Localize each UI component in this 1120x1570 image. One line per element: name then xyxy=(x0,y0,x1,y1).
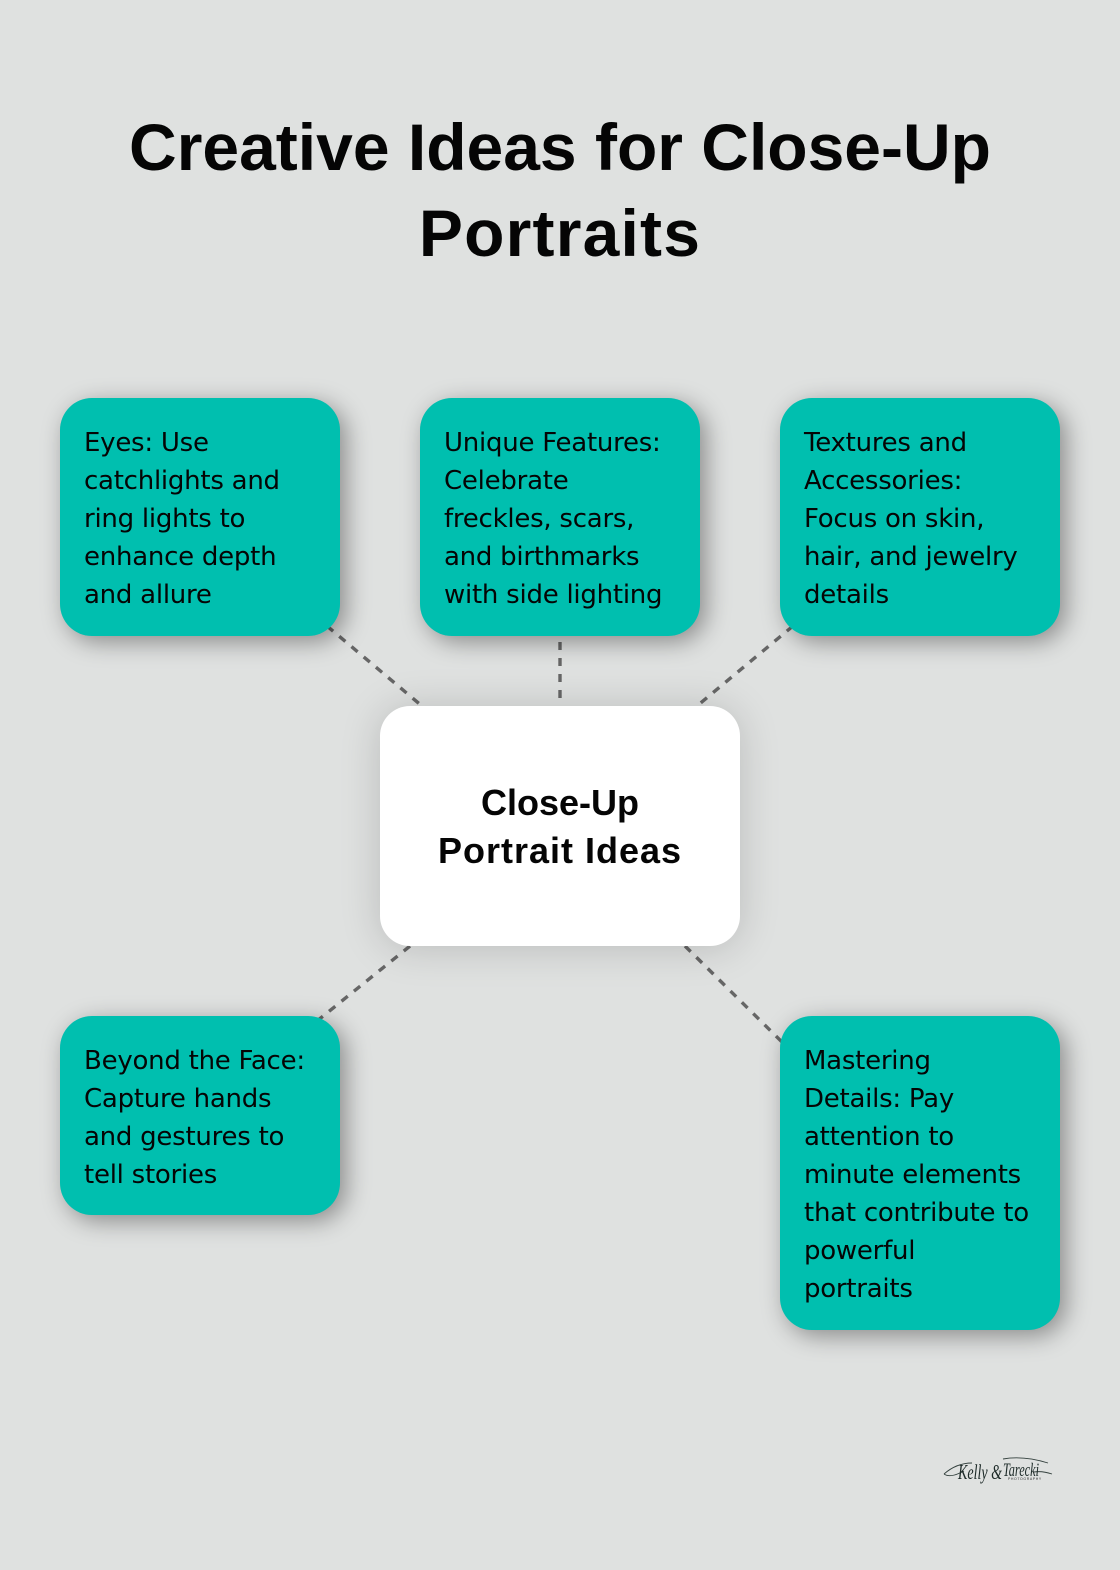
panel: mastering details: minute elements xyxy=(804,1160,1021,1190)
panel: eyes: Eyes: Use xyxy=(84,428,209,458)
panel: textures and accessories xyxy=(780,398,1060,636)
title: Portraits xyxy=(419,196,701,270)
panel: beyond the face: tell stories xyxy=(84,1160,217,1190)
panel: textures and accessories: Textures and xyxy=(804,428,967,458)
panel: unique features: Celebrate xyxy=(444,466,568,496)
panel: mastering details: Mastering xyxy=(804,1046,931,1076)
panel: mastering details xyxy=(780,1016,1060,1330)
title: Creative Ideas for Close-Up xyxy=(129,110,991,184)
panel: textures and accessories: details xyxy=(804,580,889,610)
panel: eyes: enhance depth xyxy=(84,542,276,572)
panel: mastering details: portraits xyxy=(804,1274,913,1304)
title xyxy=(129,110,991,270)
logo: signature: PHOTOGRAPHY xyxy=(1008,1477,1042,1481)
panel: mastering details: attention to xyxy=(804,1122,954,1152)
panel: eyes: and allure xyxy=(84,580,212,610)
panel: unique features xyxy=(420,398,700,636)
panel: unique features: freckles, scars, xyxy=(444,504,634,534)
panel: unique features: and birthmarks xyxy=(444,542,639,572)
panel: mastering details: powerful xyxy=(804,1236,915,1266)
panel: eyes: catchlights and xyxy=(84,466,280,496)
panel: eyes xyxy=(60,398,340,636)
panel: textures and accessories: Focus on skin, xyxy=(804,504,984,534)
logo: signature: Kelly & xyxy=(957,1460,1002,1484)
panel: mastering details: Details: Pay xyxy=(804,1084,954,1114)
panel: eyes: ring lights to xyxy=(84,504,245,534)
panel: beyond the face: and gestures to xyxy=(84,1122,284,1152)
panel: center topic: Portrait Ideas xyxy=(438,830,682,871)
panel: textures and accessories: Accessories: xyxy=(804,466,962,496)
logo: signature: Tarecki xyxy=(1003,1460,1039,1481)
panel: textures and accessories: hair, and jewelry xyxy=(804,542,1018,572)
panel: beyond the face: Capture hands xyxy=(84,1084,271,1114)
panel: center topic xyxy=(380,706,740,946)
panel: center topic: Close-Up xyxy=(481,782,639,823)
panel: beyond the face xyxy=(60,1016,340,1215)
panel: beyond the face: Beyond the Face: xyxy=(84,1046,305,1076)
panel: mastering details: that contribute to xyxy=(804,1198,1029,1228)
panel: unique features: with side lighting xyxy=(444,580,662,610)
panel: unique features: Unique Features: xyxy=(444,428,661,458)
